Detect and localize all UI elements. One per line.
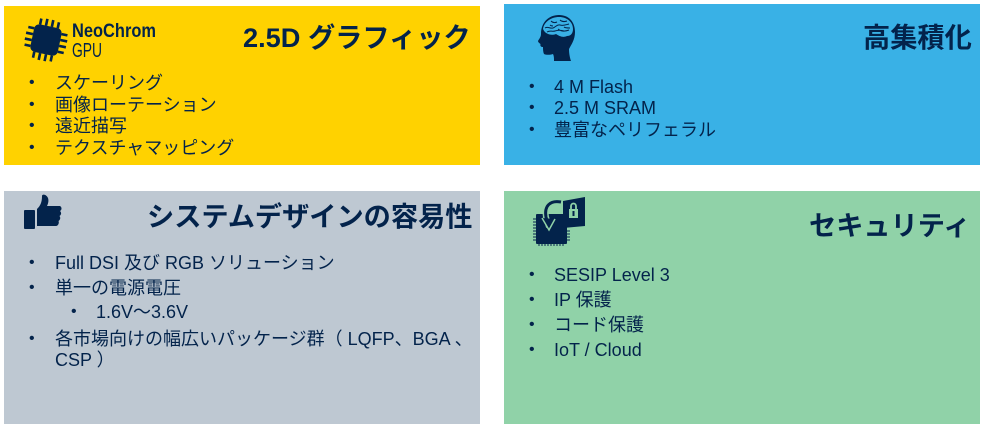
list: integration features: 豊富なペリフェラル [554, 120, 716, 140]
icon: NeoChrom GPU logo [24, 18, 156, 62]
list: system design features: • [29, 254, 35, 271]
icon: head with brain [538, 15, 575, 61]
list: integration features: • [529, 78, 535, 95]
list: integration features: 2.5 M SRAM [554, 98, 656, 118]
icon: NeoChrom GPU logo: NeoChrom [72, 21, 156, 42]
list: system design features: CSP ） [55, 350, 115, 370]
heading: security: セキュリティ [809, 210, 970, 241]
list: security features: IoT / Cloud [554, 340, 642, 360]
list: security features: • [529, 341, 535, 358]
list: graphics features: テクスチャマッピング [55, 138, 234, 158]
list: graphics features [29, 73, 234, 158]
list: integration features [529, 77, 716, 140]
icon: NeoChrom GPU logo: GPU [72, 40, 102, 62]
list: graphics features: • [29, 117, 35, 134]
list: security features: • [529, 291, 535, 308]
list: system design features: 単一の電源電圧 [55, 278, 181, 298]
list: security features: SESIP Level 3 [554, 265, 670, 285]
list: security features: • [529, 266, 535, 283]
icon: secure chip with lock [533, 197, 585, 246]
list: graphics features: • [29, 139, 35, 156]
list: graphics features: スケーリング [55, 73, 163, 93]
icon: thumbs up [24, 194, 62, 229]
heading: ease of system design: システムデザインの容易性 [147, 201, 472, 232]
list: integration features: 4 M Flash [554, 77, 633, 97]
list: system design features: 1.6V～3.6V [96, 302, 188, 322]
list: system design features: Full DSI 及び RGB ソリューション [55, 253, 335, 273]
list: system design features: • [71, 303, 77, 320]
list: system design features: • [29, 330, 35, 347]
list: system design features: • [29, 279, 35, 296]
list: security features [529, 265, 670, 360]
list: security features: コード保護 [554, 315, 644, 335]
list: system design features [29, 253, 473, 370]
panel: high integration [504, 4, 980, 165]
heading: high integration: 高集積化 [863, 22, 972, 53]
list: graphics features: 画像ローテーション [55, 95, 217, 115]
heading: 2.5D graphics: 2.5D グラフィック [243, 22, 471, 53]
list: integration features: • [529, 121, 535, 138]
list: integration features: • [529, 99, 535, 116]
panel: 2.5D graphics [4, 6, 480, 165]
list: security features: IP 保護 [554, 290, 612, 310]
list: graphics features: • [29, 96, 35, 113]
list: security features: • [529, 316, 535, 333]
list: graphics features: 遠近描写 [55, 116, 127, 136]
panel: system design [4, 191, 480, 424]
list: graphics features: • [29, 74, 35, 91]
list: system design features: 各市場向けの幅広いパッケージ群（ LQFP、BGA 、 [55, 329, 473, 349]
panel: security [504, 191, 980, 424]
